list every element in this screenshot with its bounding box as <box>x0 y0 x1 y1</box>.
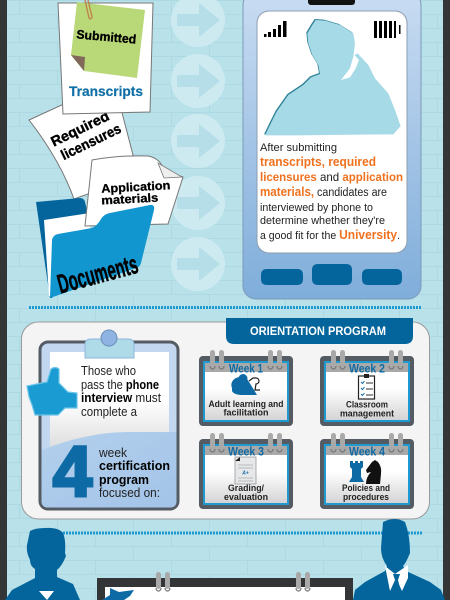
silhouette on phone <box>264 19 401 135</box>
calendar: week 2: management <box>340 408 394 418</box>
phone message: After submitting <box>260 142 337 154</box>
document: application materials: materials <box>101 191 159 207</box>
phone message: licensures and application <box>260 170 403 184</box>
curved blue footer <box>42 432 176 508</box>
clipboard text top <box>81 364 161 419</box>
orientation program banner: ORIENTATION PROGRAM <box>250 324 386 338</box>
folder front with label: Documents <box>54 249 141 299</box>
clipboard clip <box>85 330 134 358</box>
phone message: determine whether they're <box>260 215 385 227</box>
icon: pointing hand <box>102 588 134 600</box>
calendar: week 3: Grading/ <box>228 483 264 493</box>
icon: learner at lamp <box>231 374 260 395</box>
clipboard text bottom: certification <box>99 459 170 473</box>
calendar: week 1 <box>199 350 293 426</box>
document: transcripts page <box>58 0 153 114</box>
note fold <box>71 55 85 71</box>
dotted divider lower <box>60 532 422 534</box>
silhouette: left person <box>5 528 80 600</box>
clipboard text top: Those who <box>81 364 136 378</box>
calendar: week 1: Week 1 <box>229 362 263 376</box>
signal icon <box>264 21 286 37</box>
transcripts label: Transcripts <box>69 83 143 99</box>
calendar: week 1: facilitation <box>224 408 268 418</box>
calendar: week 4: Policies and <box>342 483 390 493</box>
calendar: week 4 <box>320 433 414 509</box>
icon: graded paper: A+ <box>241 470 249 476</box>
icon: checklist clipboard <box>358 374 374 399</box>
calendar: week 4: Week 4 <box>349 444 385 458</box>
icon: thumbs up <box>27 368 77 415</box>
folder back <box>36 198 90 298</box>
calendar: week 3 <box>199 433 293 509</box>
clipboard card <box>27 330 178 512</box>
phone message: materials, candidates are <box>260 185 387 199</box>
calendar: week 2: Classroom <box>346 400 388 410</box>
clipboard text bottom: week <box>98 446 128 460</box>
calendar: week 3: evaluation <box>224 492 268 502</box>
clipboard sheet <box>50 352 169 462</box>
icon: chess rook and knight <box>349 460 381 484</box>
document: required licensures: Required <box>48 108 112 150</box>
phone message: a good fit for the University. <box>260 228 400 242</box>
phone screen <box>257 11 407 253</box>
earpiece <box>308 0 355 5</box>
left dark border <box>0 0 7 600</box>
battery icon <box>374 21 400 38</box>
phone message: transcripts, required <box>260 155 376 169</box>
phone body <box>243 0 421 299</box>
phone <box>243 0 421 299</box>
arrow circles column <box>171 0 225 291</box>
dotted divider <box>29 306 421 309</box>
orientation panel <box>22 322 430 519</box>
calendar: week 2 <box>320 350 414 426</box>
document: required licensures <box>29 103 133 199</box>
calendar: week 4: procedures <box>343 492 389 502</box>
clipboard text bottom: program <box>99 473 149 487</box>
calendar: week 1: Adult learning and <box>208 399 284 409</box>
folder front with label <box>50 205 154 299</box>
big number 4: 4 <box>53 433 93 512</box>
phone buttons <box>261 264 402 285</box>
orientation program banner <box>226 318 413 344</box>
calendar: week 2: Week 2 <box>349 362 385 376</box>
calendar: week 3: Week 3 <box>228 444 264 458</box>
document: application materials: Application <box>101 178 171 196</box>
clipboard text top: pass the phone <box>81 378 159 392</box>
board rings <box>156 572 310 591</box>
submitted label: Submitted <box>76 27 137 47</box>
sticky note <box>71 2 145 78</box>
clipboard text top: interview must <box>81 391 161 405</box>
clipboard text bottom <box>98 446 170 500</box>
clipboard text bottom: focused on: <box>99 486 160 500</box>
document: required licensures: licensures <box>58 120 124 163</box>
presentation board <box>97 572 353 600</box>
clipboard text top: complete a <box>81 405 137 419</box>
silhouette: right person <box>353 519 445 600</box>
phone message <box>260 142 403 242</box>
phone message: interviewed by phone to <box>260 202 373 214</box>
paperclip <box>85 0 92 19</box>
right dark border <box>443 0 450 600</box>
document: application materials <box>85 156 183 226</box>
